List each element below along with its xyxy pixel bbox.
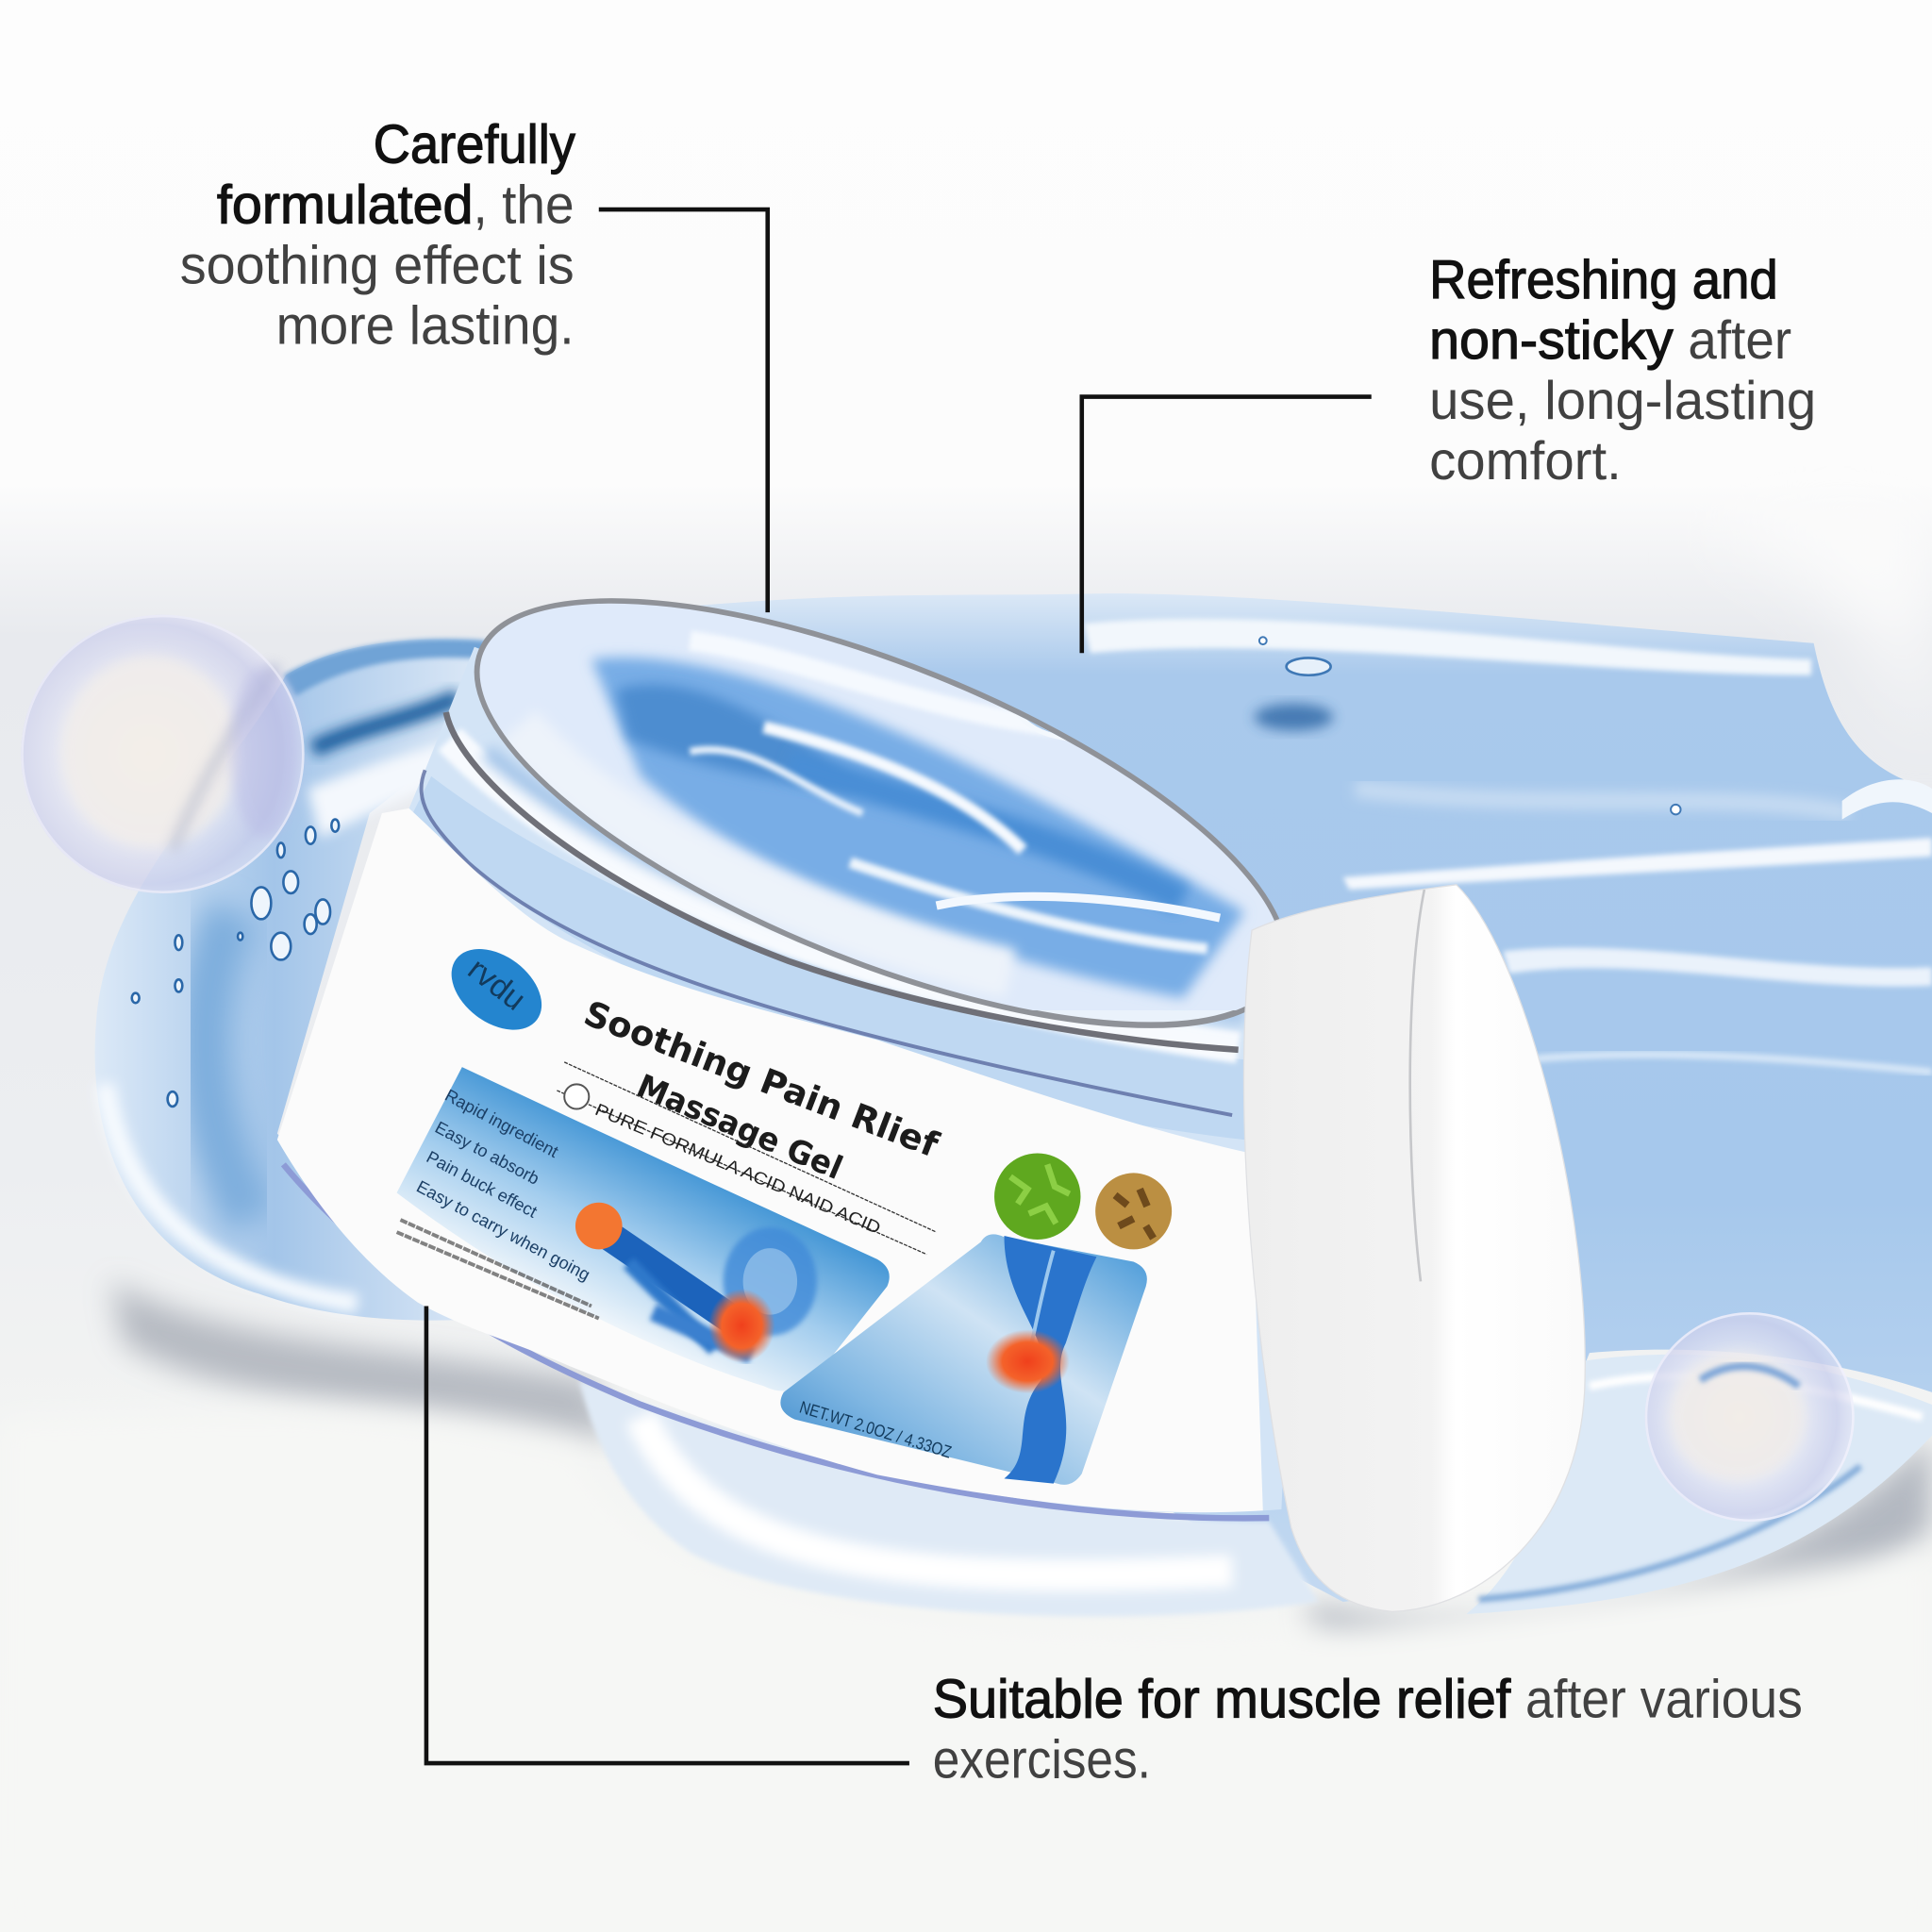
product label band (277, 808, 1263, 1512)
product name: Massage Gel (631, 1067, 848, 1188)
leader line: bottom (426, 1306, 909, 1763)
leader line: top right (1082, 397, 1372, 653)
gel pool right (690, 593, 1932, 1614)
panel: knee image (780, 1234, 1147, 1485)
bubble left (21, 615, 305, 893)
panel: shoulder image: Pain buck effect (424, 1146, 541, 1222)
soft grey shadows (0, 492, 1932, 1932)
panel: shoulder image: Easy to absorb (432, 1117, 542, 1189)
neck ridge (446, 712, 1239, 1050)
callout: carefully formulated: Carefully (374, 114, 575, 175)
callout: carefully formulated: soothing effect is (180, 235, 575, 295)
gel inside jar (479, 604, 1274, 1010)
leader line: top left (599, 209, 768, 612)
panel: shoulder image: Easy to carry when going (413, 1176, 593, 1285)
callout: refreshing: after (1688, 310, 1791, 371)
callout: carefully formulated: , the (474, 175, 575, 235)
callout: muscle relief (933, 1670, 1803, 1790)
callout: refreshing (1429, 250, 1816, 491)
icon: green herb (994, 1154, 1080, 1240)
callout: carefully formulated (180, 114, 575, 356)
product name: Soothing Pain Rlief (578, 992, 945, 1166)
brand logo: rvdu (461, 951, 532, 1018)
jar lid (1243, 885, 1585, 1611)
callout: muscle relief: after various (1525, 1670, 1803, 1730)
callout: refreshing: non-sticky (1429, 310, 1674, 371)
callout: muscle relief: Suitable for muscle relief (933, 1670, 1511, 1730)
bubble right (1645, 1312, 1855, 1522)
callout: refreshing: Refreshing and (1429, 250, 1778, 310)
brand logo (436, 932, 557, 1046)
formula line (557, 1062, 937, 1255)
jar rim and gel (474, 598, 1279, 1028)
panel: knee image: NET.WT 2.0OZ / 4.33OZ (797, 1397, 954, 1462)
callout: carefully formulated: formulated (217, 175, 474, 235)
formula line: PURE FORMULA ACID NAID ACID (592, 1099, 884, 1238)
callout: refreshing: comfort. (1429, 431, 1622, 491)
panel: shoulder image (397, 1067, 890, 1391)
callout: carefully formulated: more lasting. (276, 295, 575, 356)
panel: shoulder image: Rapid ingredient (441, 1085, 562, 1161)
jar base under label (579, 1380, 1319, 1616)
callout: refreshing: use, long-lasting (1429, 371, 1816, 431)
jar clear body (283, 647, 1306, 1518)
gel ring left (95, 640, 492, 1321)
icon: herb seed (1095, 1173, 1172, 1249)
water droplets (132, 820, 339, 1107)
callout: muscle relief: exercises. (933, 1730, 1151, 1790)
